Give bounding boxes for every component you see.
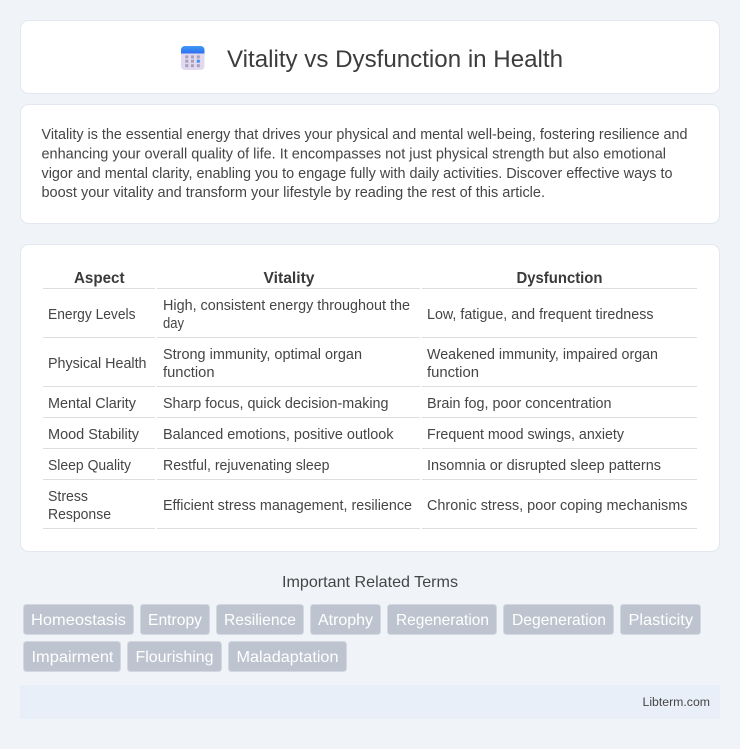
tag: homeostasis [24, 604, 134, 634]
table row: physical health: Weakened immunity, impaired organ [427, 347, 658, 363]
table header row: Vitality [264, 270, 315, 287]
tag: atrophy [310, 604, 380, 634]
tag: impairment: Impairment [32, 649, 114, 666]
tag: maladaptation [228, 642, 346, 672]
footer credit: Libterm.com [642, 695, 710, 709]
tag: flourishing [128, 642, 222, 672]
tag: homeostasis: Homeostasis [31, 612, 126, 629]
table row: stress response: Chronic stress, poor coping mechanisms [427, 498, 688, 514]
table row: physical health: function [427, 365, 479, 381]
table row: stress response [48, 489, 688, 523]
panel: comparison table [20, 244, 720, 552]
table header row: Dysfunction [516, 270, 602, 287]
table row: stress response: Efficient stress management, resilience [163, 498, 412, 514]
tag: resilience [216, 604, 304, 634]
table header row [74, 270, 602, 287]
table row: physical health: function [163, 365, 214, 381]
table row: mental clarity: Brain fog, poor concentration [427, 396, 612, 412]
tag: resilience: Resilience [224, 612, 296, 629]
table row: physical health: Physical Health [48, 356, 146, 372]
table row: energy levels: High, consistent energy throughout the [163, 298, 410, 314]
table row: mood stability: Mood Stability [48, 427, 140, 443]
related term tags [24, 604, 700, 672]
table row: energy levels: Energy Levels [48, 307, 136, 323]
heading: important related terms: Important Related Terms [282, 574, 458, 591]
tag: plasticity [620, 604, 700, 634]
table row: sleep quality: Insomnia or disrupted sleep patterns [427, 458, 661, 474]
icon: calendar [181, 46, 204, 70]
panel: introduction [20, 104, 720, 224]
table header row: Aspect [74, 270, 124, 287]
text block: introduction paragraph: vigor and mental clarity, enabling you to engage fully with daily activities. Discover effective ways to [42, 166, 672, 182]
text block: introduction paragraph [42, 127, 688, 201]
table row: mood stability [48, 427, 625, 443]
table row: stress response: Stress [48, 489, 88, 505]
tag: impairment [24, 642, 120, 672]
tag: entropy: Entropy [148, 612, 202, 629]
table row: energy levels: day [163, 316, 185, 332]
table row: mood stability: Frequent mood swings, anxiety [427, 427, 625, 443]
tag: degeneration: Degeneration [512, 612, 606, 629]
table row: mental clarity: Sharp focus, quick decision-making [163, 396, 388, 412]
panel: title header [20, 20, 720, 94]
table row: stress response: Response [48, 507, 111, 523]
table row: sleep quality: Sleep Quality [48, 458, 132, 474]
tag: plasticity: Plasticity [628, 612, 693, 629]
tag: regeneration [388, 604, 496, 634]
table row: sleep quality: Restful, rejuvenating sleep [163, 458, 330, 474]
table row: mood stability: Balanced emotions, positive outlook [163, 427, 394, 443]
tag: regeneration: Regeneration [396, 612, 489, 629]
table row: physical health: Strong immunity, optimal organ [163, 347, 362, 363]
table row: energy levels: Low, fatigue, and frequent tiredness [427, 307, 654, 323]
table row: mental clarity [48, 396, 612, 412]
tag: atrophy: Atrophy [318, 612, 373, 629]
table row: sleep quality [48, 458, 661, 474]
title: Vitality vs Dysfunction in Health [227, 46, 563, 73]
tag: maladaptation: Maladaptation [236, 649, 338, 666]
table row: physical health [48, 347, 658, 381]
footer bar [20, 685, 720, 719]
tag: flourishing: Flourishing [136, 649, 214, 666]
table row: energy levels [48, 298, 654, 332]
tag: degeneration [504, 604, 614, 634]
text block: introduction paragraph: enhancing your overall quality of life. It encompasses not just physical strength but also emotional [42, 146, 666, 162]
text block: introduction paragraph: boost your vitality and transform your lifestyle by reading the rest of this article. [42, 185, 545, 201]
text block: introduction paragraph: Vitality is the essential energy that drives your physical and mental well-being, fostering resilience and [42, 127, 688, 143]
tag: entropy [140, 604, 210, 634]
table row: mental clarity: Mental Clarity [48, 396, 137, 412]
